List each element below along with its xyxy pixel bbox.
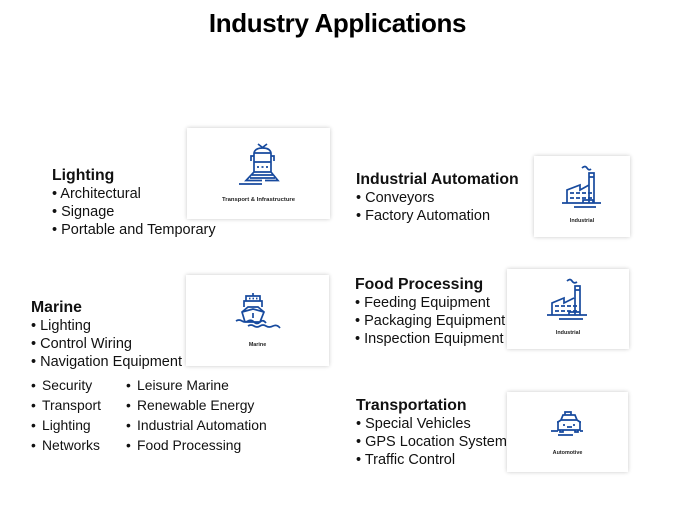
icon: ship [236, 293, 281, 328]
list: right column: Leisure Marine [137, 376, 229, 392]
title: Industry Applications [209, 8, 466, 38]
text: Lighting [52, 166, 216, 238]
text: Marine: Marine [31, 299, 82, 316]
card: transportation [507, 392, 628, 472]
icon: factory [562, 166, 601, 208]
list: left column: Security [42, 376, 92, 392]
icon: factory [547, 278, 587, 320]
list: left column: Lighting [42, 417, 91, 433]
card: marine: Marine [249, 342, 266, 348]
text: Marine: • Control Wiring [31, 336, 132, 352]
card: food processing: Industrial [556, 330, 580, 336]
card: transport and infrastructure [187, 128, 330, 219]
text: Lighting: • Portable and Temporary [52, 222, 216, 238]
list: left column: Networks [42, 437, 100, 453]
list: right column [126, 376, 267, 453]
text: Lighting: • Signage [52, 204, 114, 220]
text: Industrial Automation: • Conveyors [356, 190, 434, 206]
text: Lighting: • Architectural [52, 186, 141, 202]
icon: train [239, 143, 280, 185]
text: Industrial Automation [356, 170, 519, 224]
text: Marine: • Navigation Equipment [31, 354, 182, 370]
list: left column: • [31, 417, 36, 433]
list: right column: Industrial Automation [137, 417, 267, 433]
text: Industrial Automation: • Factory Automation [356, 208, 490, 224]
text: Marine [31, 299, 182, 370]
list: right column: • [126, 437, 131, 453]
text: Food Processing: • Packaging Equipment [355, 312, 505, 328]
text: Transportation [356, 396, 514, 468]
list: right column: Food Processing [137, 437, 241, 453]
text: Transportation: • Traffic Control [356, 452, 455, 468]
list: right column: Renewable Energy [137, 397, 254, 413]
text: Food Processing [355, 276, 506, 346]
text: Food Processing: Food Processing [355, 276, 483, 292]
list: right column: • [126, 397, 131, 413]
list: right column: • [126, 417, 131, 433]
list: left column: Transport [42, 397, 101, 413]
list: left column: • [31, 397, 36, 413]
text: Transportation: • GPS Location Systems [356, 434, 514, 450]
list: left column [31, 376, 101, 453]
card: transportation: Automotive [553, 450, 582, 456]
card: marine [186, 275, 329, 366]
card: food processing [507, 269, 629, 349]
text: Food Processing: • Feeding Equipment [355, 294, 490, 310]
text: Transportation: • Special Vehicles [356, 416, 471, 432]
text: Industrial Automation: Industrial Automation [356, 170, 519, 188]
card: transport and infrastructure: Transport & Infrastructure [222, 197, 295, 203]
list: left column: • [31, 437, 36, 453]
list: right column: • [126, 376, 131, 392]
card: industrial automation [534, 156, 630, 237]
text: Transportation: Transportation [356, 396, 467, 414]
text: Lighting: Lighting [52, 166, 114, 184]
icon: car [551, 411, 583, 436]
card: industrial automation: Industrial [570, 218, 594, 224]
text: Marine: • Lighting [31, 318, 91, 334]
text: Food Processing: • Inspection Equipment [355, 330, 504, 346]
list: left column: • [31, 376, 36, 392]
